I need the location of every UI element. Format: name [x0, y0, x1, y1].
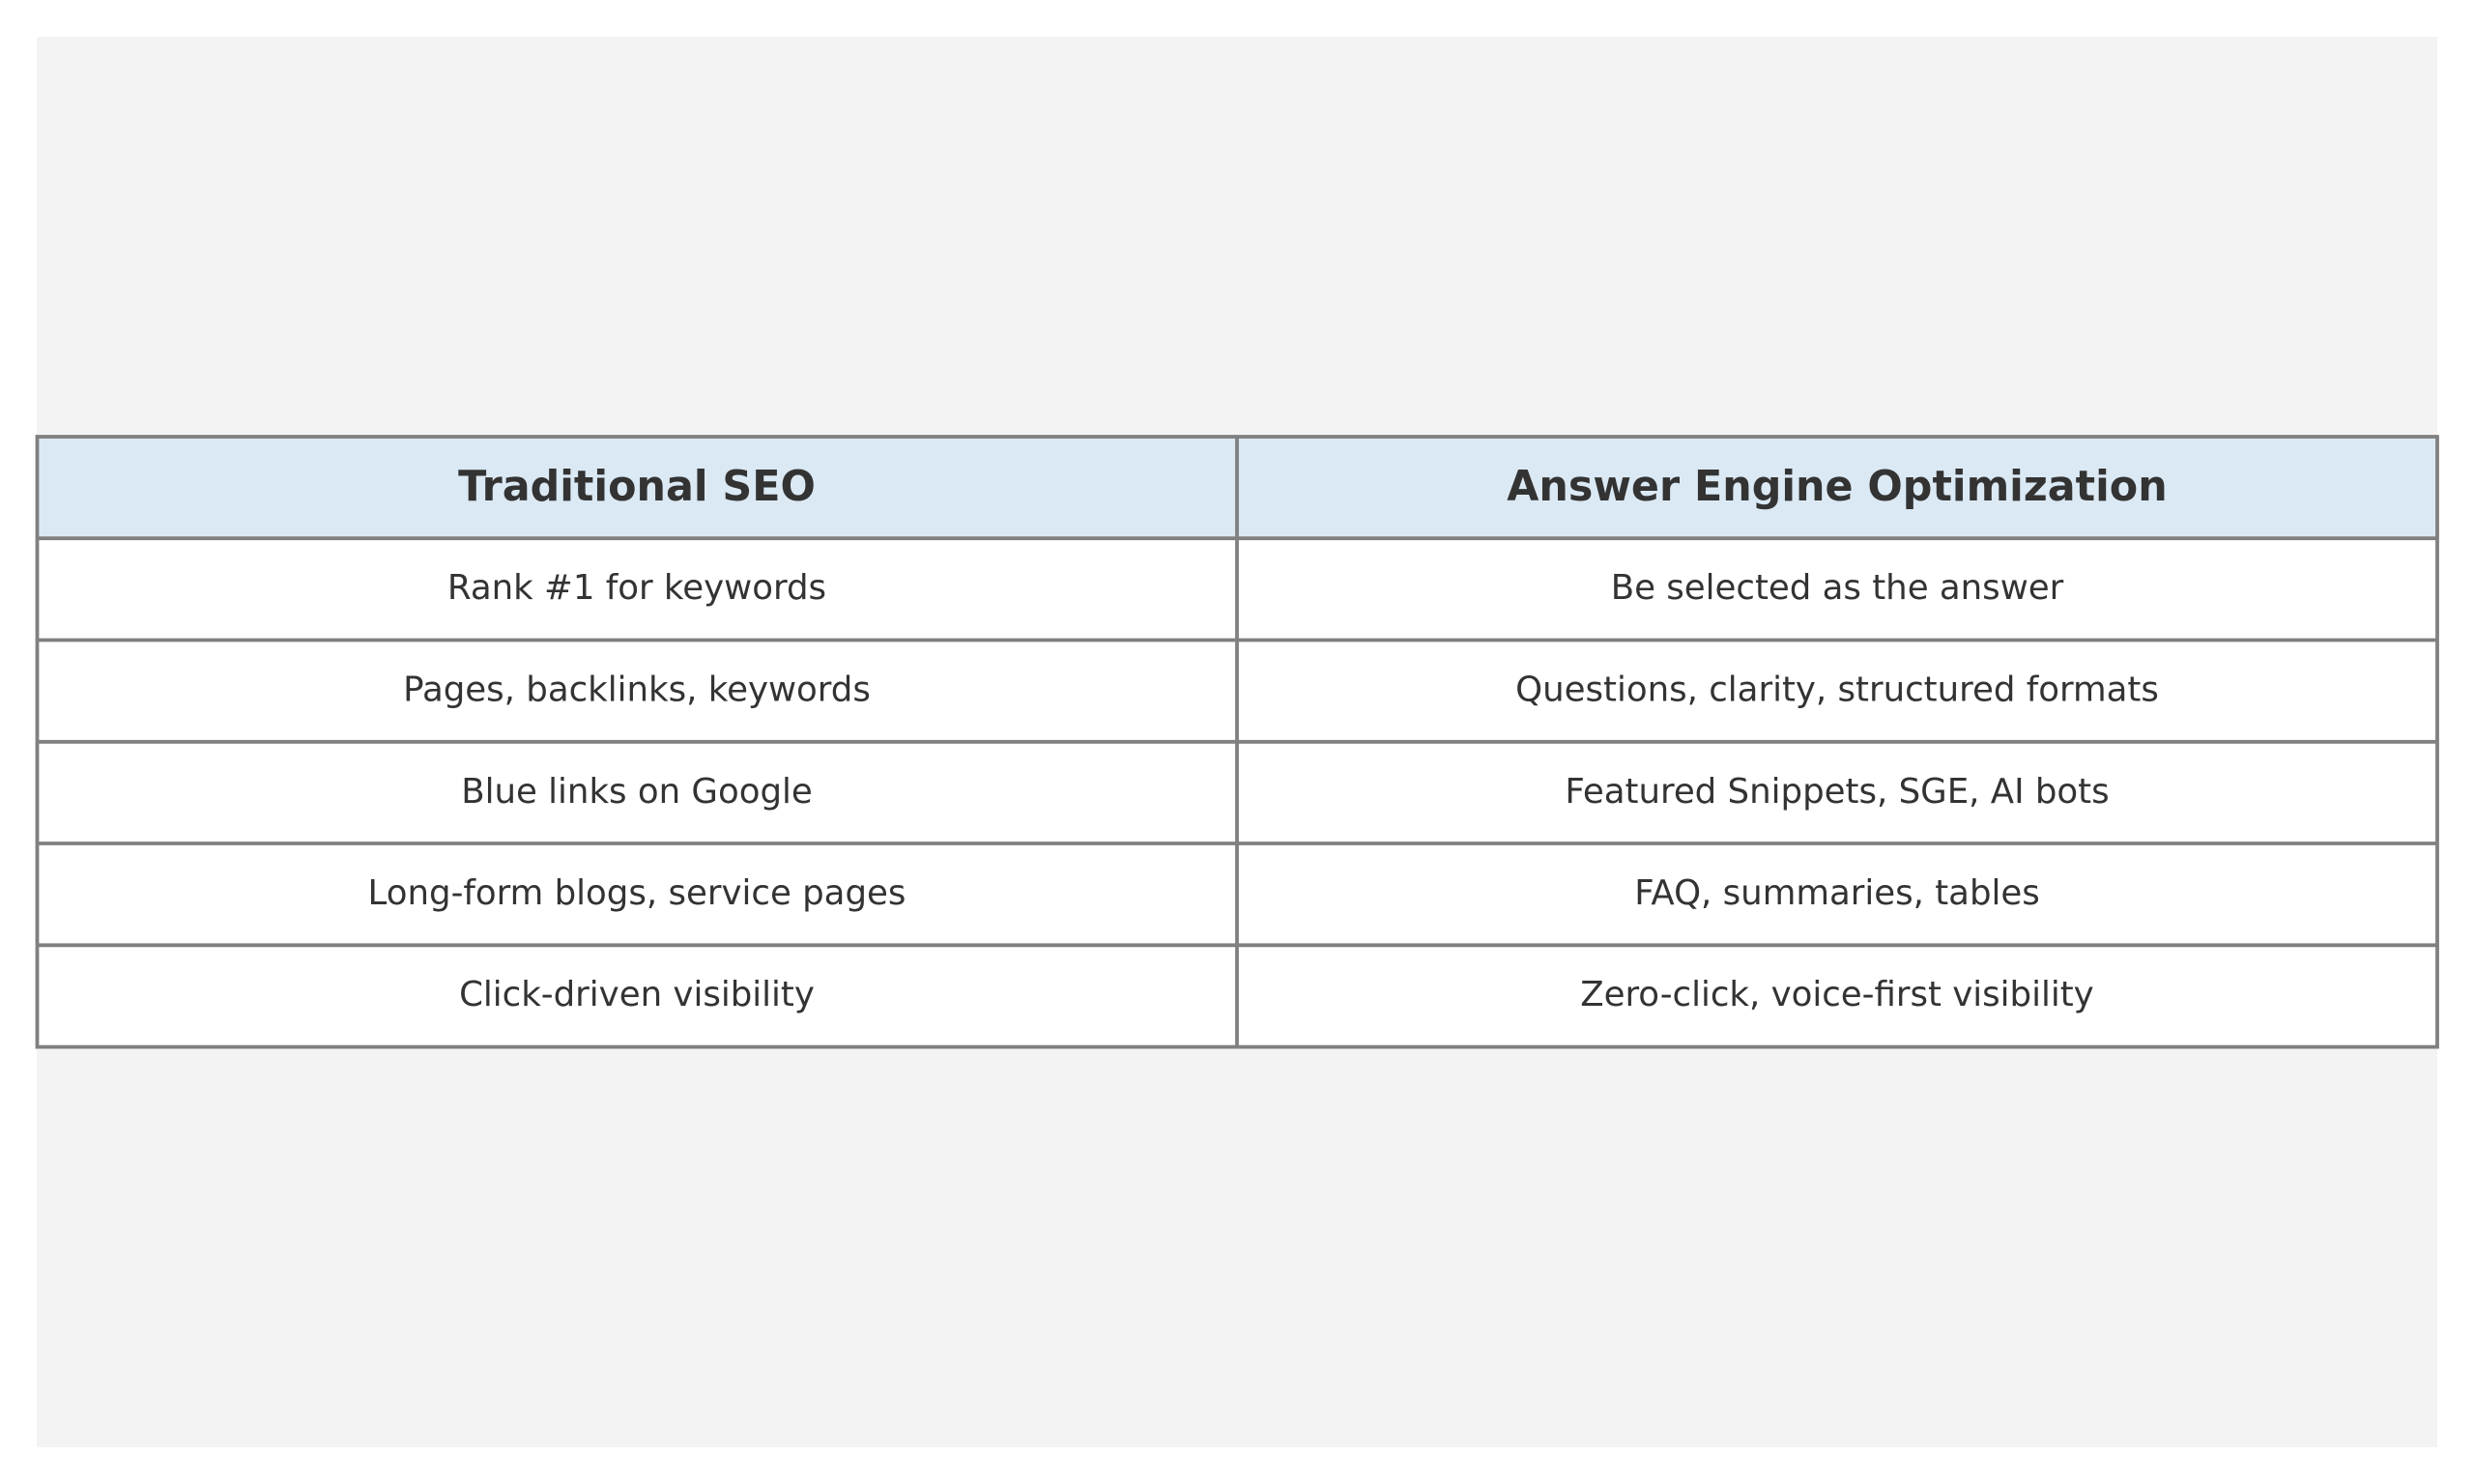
row 3: Blue links on Google: [461, 772, 813, 812]
row 1: Be selected as the answer: [1611, 568, 2064, 608]
row 5: Zero-click, voice-first visibility: [1580, 975, 2094, 1014]
row 3: Featured Snippets, SGE, AI bots: [1565, 772, 2110, 812]
row 5: [459, 975, 2094, 1014]
row 1: [447, 568, 2064, 608]
row 2: [403, 670, 2159, 709]
row 4: [368, 873, 2040, 913]
table grid lines: [37, 437, 2437, 1047]
row 4: Long-form blogs, service pages: [368, 873, 906, 913]
row 2: Pages, backlinks, keywords: [403, 670, 871, 709]
header row: [37, 437, 2437, 538]
comparison table: [37, 437, 2437, 1047]
row 4: FAQ, summaries, tables: [1634, 873, 2040, 913]
heading: Answer Engine Optimization: Answer Engine Optimization: [1507, 463, 2168, 511]
row 5: Click-driven visibility: [459, 975, 815, 1014]
body rows background: [37, 538, 2437, 1047]
row 2: Questions, clarity, structured formats: [1515, 670, 2159, 709]
heading: Traditional SEO: Traditional SEO: [458, 463, 816, 511]
row 3: [461, 772, 2110, 812]
row 1: Rank #1 for keywords: [447, 568, 826, 608]
